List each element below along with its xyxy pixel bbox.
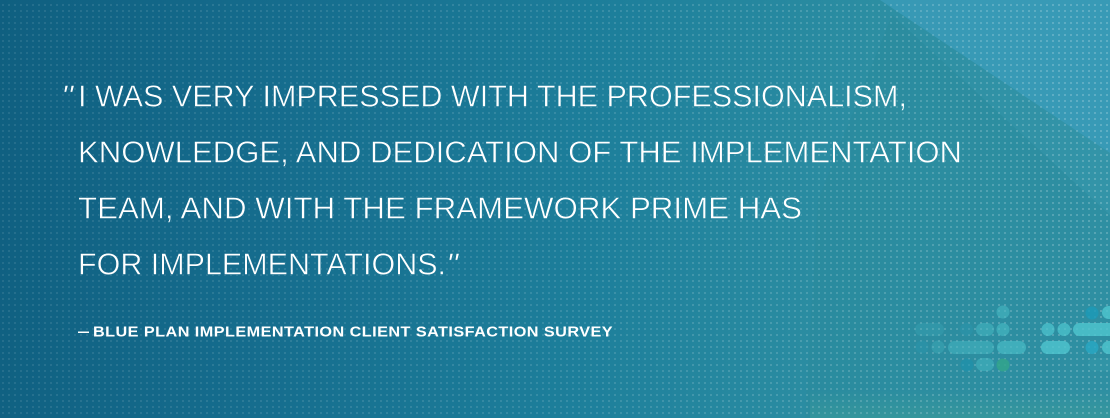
quote line 3: TEAM, AND WITH THE FRAMEWORK PRIME HAS [78,192,802,226]
background shape: green glow along bottom right [810,390,1110,418]
quote text [61,80,962,282]
quote line 4: FOR IMPLEMENTATIONS. [78,248,446,282]
row 3 pills [916,340,1110,354]
opening quotation mark: " [61,80,74,114]
closing quotation mark: " [446,248,459,282]
row 4 pills [960,358,1110,372]
decorative pill pattern [915,306,1110,372]
background shape: lighter top-right corner [880,0,1110,153]
attribution dash [78,332,89,333]
attribution text: BLUE PLAN IMPLEMENTATION CLIENT SATISFACTION SURVEY [93,324,613,340]
background shape: darker translucent triangle [805,15,1110,418]
quote line 1: I WAS VERY IMPRESSED WITH THE PROFESSIONALISM, [78,80,907,114]
row 1 pills [996,306,1110,320]
row 2 pills [915,323,1110,336]
quote line 2: KNOWLEDGE, AND DEDICATION OF THE IMPLEMENTATION [78,136,962,170]
